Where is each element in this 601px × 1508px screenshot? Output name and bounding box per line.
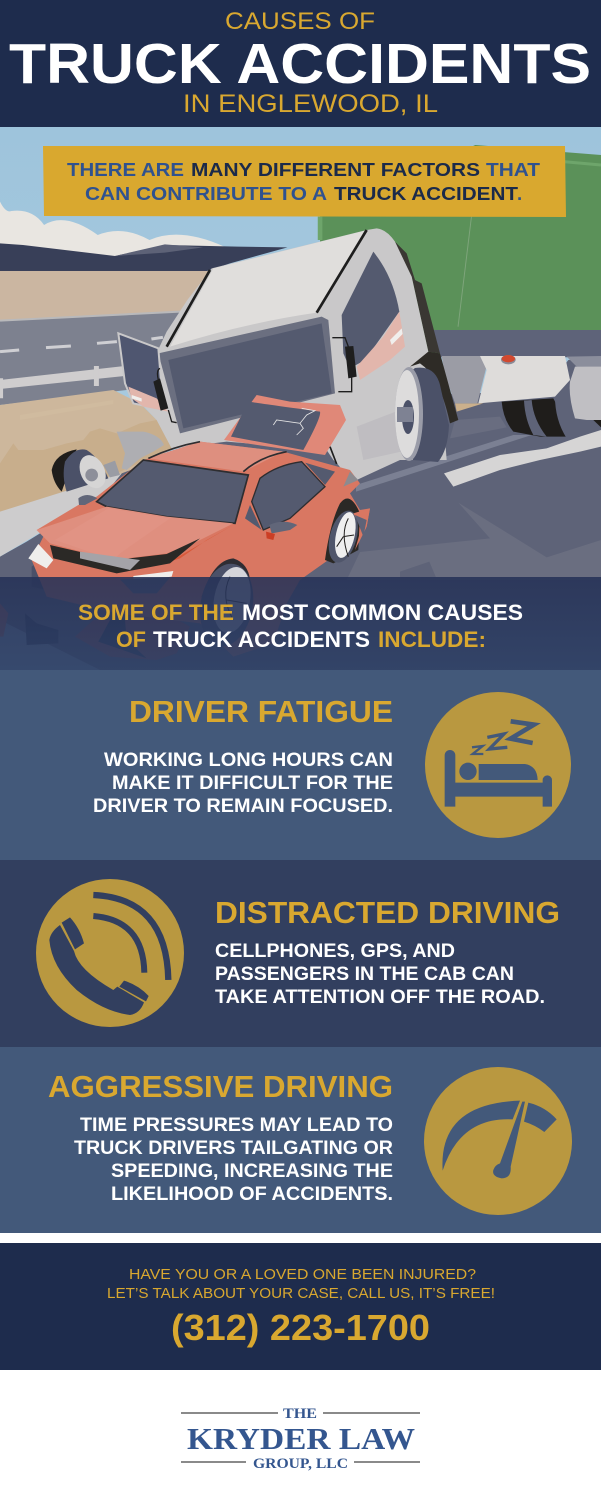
title line: location: IN ENGLEWOOD, IL [183,90,438,118]
panel: call to action [0,1243,601,1370]
banner: contributing factors: MANY DIFFERENT FACTORS [191,159,480,180]
near ground, guard rail and detached wheel [0,390,601,670]
panel: common causes intro [0,577,601,670]
panel: common causes intro: INCLUDE: [378,627,486,652]
text: aggressive driving description: LIKELIHOOD OF ACCIDENTS. [111,1183,393,1205]
panel: distracted driving [0,860,601,1047]
text: distracted driving description: CELLPHONES, GPS, AND [215,940,455,962]
logo: the kryder law group [181,1406,420,1472]
logo: the kryder law group: THE [283,1406,317,1422]
icon: sleeping in bed [425,692,571,838]
panel: common causes intro: SOME OF THE [78,600,234,625]
banner: contributing factors: CAN CONTRIBUTE TO A [85,183,327,204]
banner: contributing factors [43,146,566,217]
red car [28,395,370,657]
text: driver fatigue description [93,749,393,817]
logo: the kryder law group: GROUP, LLC [253,1456,348,1472]
text: call to action: LET’S TALK ABOUT YOUR CASE, CALL US, IT’S FREE! [107,1285,495,1302]
text: aggressive driving description: SPEEDING, INCREASING THE [111,1160,393,1182]
far landscape: clouds, hills, road, trailer [0,145,601,405]
icon: speedometer [424,1067,572,1215]
text: aggressive driving description: TRUCK DRIVERS TAILGATING OR [74,1137,393,1159]
banner: contributing factors: TRUCK ACCIDENT [334,183,519,204]
text: distracted driving description [215,940,545,1008]
panel: common causes intro: TRUCK ACCIDENTS [153,627,370,652]
text: aggressive driving description: TIME PRESSURES MAY LEAD TO [80,1114,393,1136]
text: driver fatigue description: WORKING LONG HOURS CAN [104,749,393,771]
illustration: truck and car crash scene [0,127,601,670]
panel: aggressive driving [0,1047,601,1233]
text: distracted driving description: PASSENGERS IN THE CAB CAN [215,963,514,985]
text: distracted driving description: TAKE ATTENTION OFF THE ROAD. [215,986,545,1008]
banner: contributing factors: THERE ARE [67,159,184,180]
banner: contributing factors: . [517,183,522,204]
header panel [0,0,601,127]
truck cab [118,228,458,480]
panel: driver fatigue [0,670,601,860]
text: call to action [107,1266,495,1302]
car parts under the overlay [0,603,190,670]
road and truck chassis [347,355,601,580]
logo: the kryder law group: KRYDER LAW [187,1421,415,1456]
panel: common causes intro: MOST COMMON CAUSES [242,600,523,625]
text: aggressive driving description [74,1114,393,1205]
text: call to action: HAVE YOU OR A LOVED ONE BEEN INJURED? [129,1266,476,1283]
heading: driver fatigue: DRIVER FATIGUE [129,694,393,729]
title line: truck accidents: TRUCK ACCIDENTS [9,32,591,96]
text: driver fatigue description: DRIVER TO REMAIN FOCUSED. [93,795,393,817]
phone number: (312) 223-1700 [171,1307,430,1348]
panel: common causes intro: OF [116,627,146,652]
heading: distracted driving: DISTRACTED DRIVING [215,895,560,930]
icon: telephone [36,879,184,1027]
text: driver fatigue description: MAKE IT DIFFICULT FOR THE [112,772,393,794]
truck front wheel [395,367,449,462]
banner: contributing factors: THAT [486,159,541,180]
heading: aggressive driving: AGGRESSIVE DRIVING [48,1069,393,1104]
title line: causes of: CAUSES OF [225,8,375,35]
